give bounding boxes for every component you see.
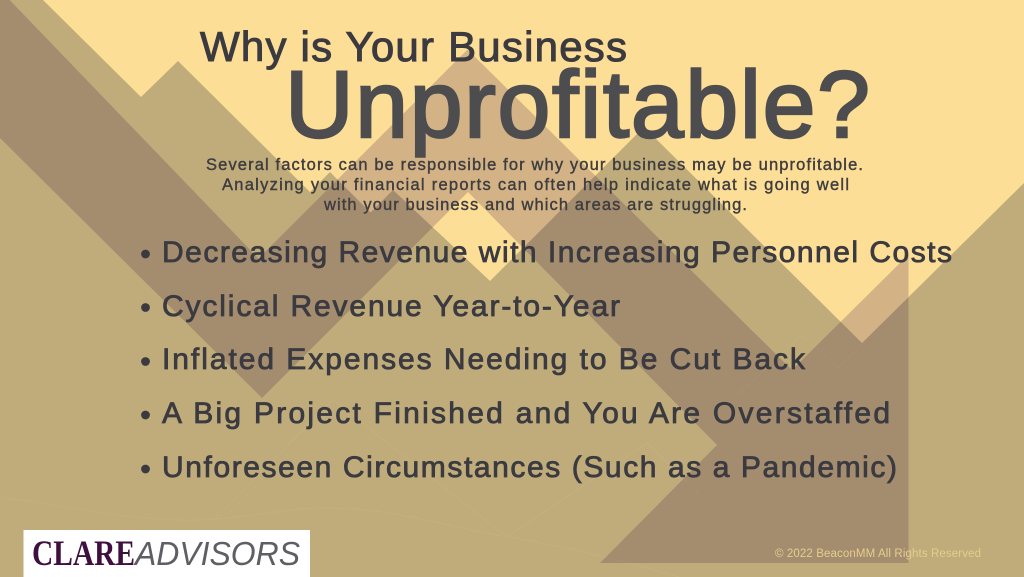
title: second line: Unprofitable?: [285, 52, 870, 158]
logo: Clare Advisors: ADVISORS: [133, 535, 300, 572]
bullet list of causes: [142, 236, 952, 484]
intro paragraph: Several factors can be responsible for why your business may be unprofitable.: [206, 156, 863, 174]
title: first line: Why is Your Business: [200, 23, 627, 70]
bullet 1: Decreasing Revenue with Increasing Personnel Costs: [162, 236, 952, 269]
bullet 5: Unforeseen Circumstances (Such as a Pandemic): [162, 451, 897, 484]
bullet 2: Cyclical Revenue Year-to-Year: [162, 290, 620, 323]
logo: Clare Advisors: CLARE: [32, 533, 135, 573]
intro paragraph: [206, 156, 863, 214]
bullet 3: Inflated Expenses Needing to Be Cut Back: [162, 343, 806, 376]
copyright notice: © 2022 BeaconMM All Rights Reserved: [775, 548, 981, 560]
intro paragraph: Analyzing your financial reports can often help indicate what is going well: [222, 176, 849, 194]
intro paragraph: with your business and which areas are struggling.: [323, 196, 747, 214]
background: faint contour lines: [0, 335, 862, 577]
bullet 4: A Big Project Finished and You Are Overstaffed: [162, 397, 890, 430]
logo: Clare Advisors: [24, 530, 310, 577]
